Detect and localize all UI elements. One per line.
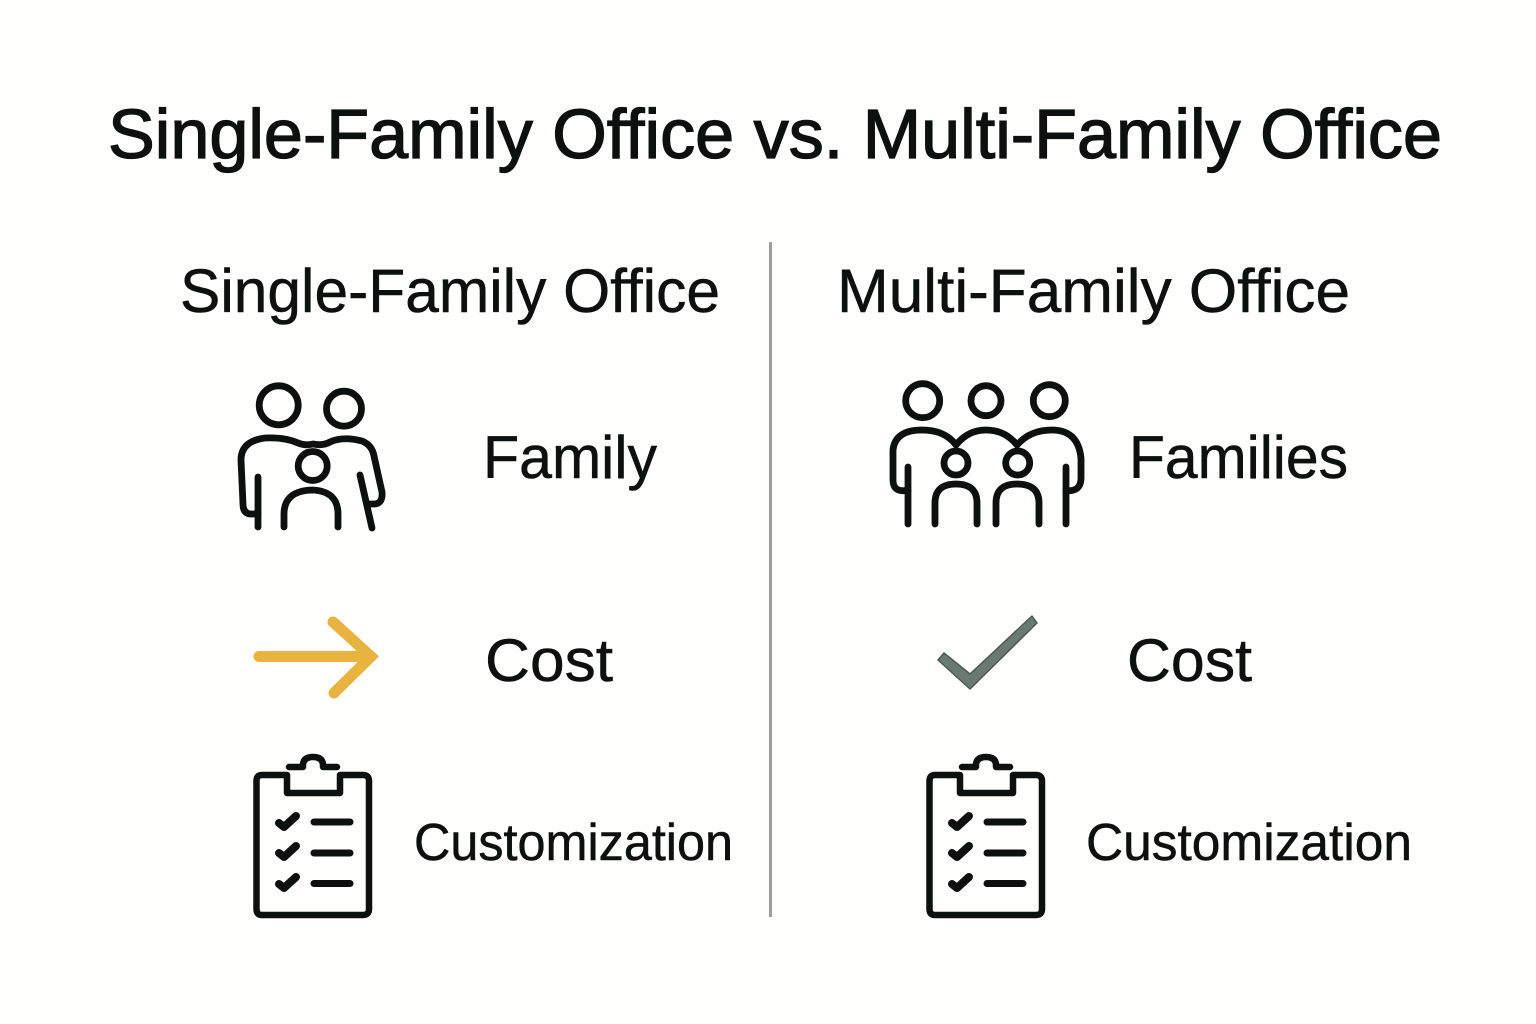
icon: clipboard (256, 757, 369, 915)
icon: yellow arrow (259, 622, 371, 693)
heading: single-family office: Single-Family Office (180, 257, 720, 325)
label: cost: Cost (485, 627, 613, 694)
icon: families (893, 384, 1081, 524)
label: families: Families (1129, 424, 1348, 491)
title: Single-Family Office vs. Multi-Family Office (108, 95, 1442, 173)
label: customization: Customization (1086, 814, 1412, 872)
label: family: Family (483, 424, 657, 491)
panel: multi-family office (837, 257, 1412, 915)
icon: check mark (938, 616, 1037, 689)
label: cost: Cost (1127, 627, 1252, 694)
panel: single-family office (180, 257, 733, 915)
label: customization: Customization (414, 814, 733, 872)
icon: family (241, 386, 382, 528)
icon: clipboard (930, 757, 1042, 915)
heading: multi-family office: Multi-Family Office (837, 257, 1350, 325)
